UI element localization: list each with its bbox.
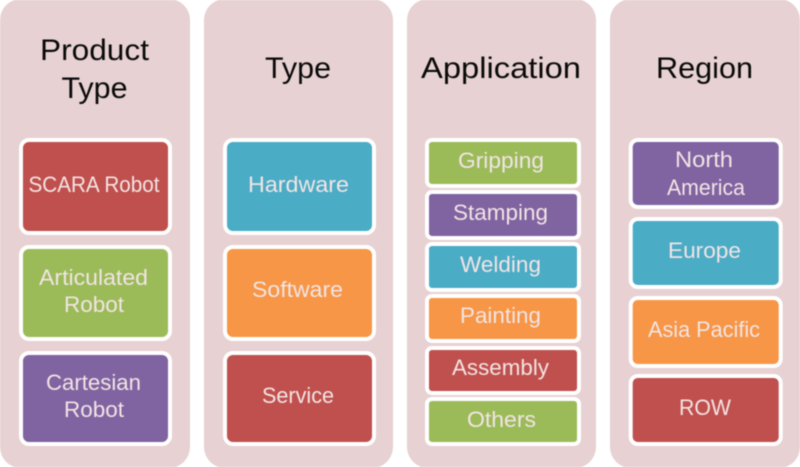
box: Software bbox=[225, 247, 374, 339]
box: Assembly: Assembly bbox=[452, 355, 549, 380]
panel: Application bbox=[407, 0, 596, 467]
box: Software: Software bbox=[252, 277, 343, 302]
heading: Product Type: Product bbox=[40, 34, 150, 67]
box: Asia Pacific bbox=[631, 298, 781, 366]
panel: Type bbox=[204, 0, 393, 467]
box: Painting: Painting bbox=[460, 303, 541, 328]
box: Stamping bbox=[427, 192, 579, 238]
box: ROW: ROW bbox=[679, 395, 731, 420]
box: Articulated Robot: Robot bbox=[64, 292, 124, 317]
heading: Region: Region bbox=[656, 52, 753, 85]
box: Service: Service bbox=[262, 383, 334, 408]
box: Articulated Robot: Articulated bbox=[39, 265, 148, 290]
heading: Application: Application bbox=[421, 52, 581, 85]
box: North America bbox=[631, 140, 781, 207]
box: Articulated Robot bbox=[21, 247, 170, 339]
panel: Product Type bbox=[0, 0, 190, 467]
box: Europe: Europe bbox=[668, 238, 741, 263]
box: Others bbox=[427, 399, 579, 444]
box: Welding: Welding bbox=[460, 252, 541, 277]
box: Europe bbox=[631, 219, 781, 287]
box: Stamping: Stamping bbox=[453, 200, 548, 225]
panel: Region bbox=[610, 0, 800, 467]
box: Assembly bbox=[427, 348, 579, 393]
heading: Product Type bbox=[40, 34, 150, 105]
heading: Type: Type bbox=[265, 52, 331, 85]
box: Painting bbox=[427, 296, 579, 341]
box: Hardware: Hardware bbox=[248, 172, 349, 197]
box: SCARA Robot bbox=[21, 140, 170, 233]
box: Cartesian Robot: Cartesian bbox=[46, 370, 141, 395]
box: Others: Others bbox=[467, 407, 536, 432]
box: Service bbox=[225, 353, 374, 444]
box: Gripping bbox=[427, 140, 579, 186]
heading: Product Type: Type bbox=[62, 72, 128, 105]
box: Hardware bbox=[225, 140, 374, 233]
box: Gripping: Gripping bbox=[458, 148, 544, 173]
box: North America: North bbox=[675, 147, 733, 172]
box: North America: America bbox=[667, 175, 746, 200]
box: ROW bbox=[631, 376, 781, 444]
box: Cartesian Robot bbox=[21, 353, 170, 444]
box: Cartesian Robot: Robot bbox=[64, 397, 124, 422]
box: Welding bbox=[427, 244, 579, 290]
box: Asia Pacific: Asia Pacific bbox=[648, 317, 760, 342]
box: SCARA Robot: SCARA Robot bbox=[28, 172, 160, 197]
